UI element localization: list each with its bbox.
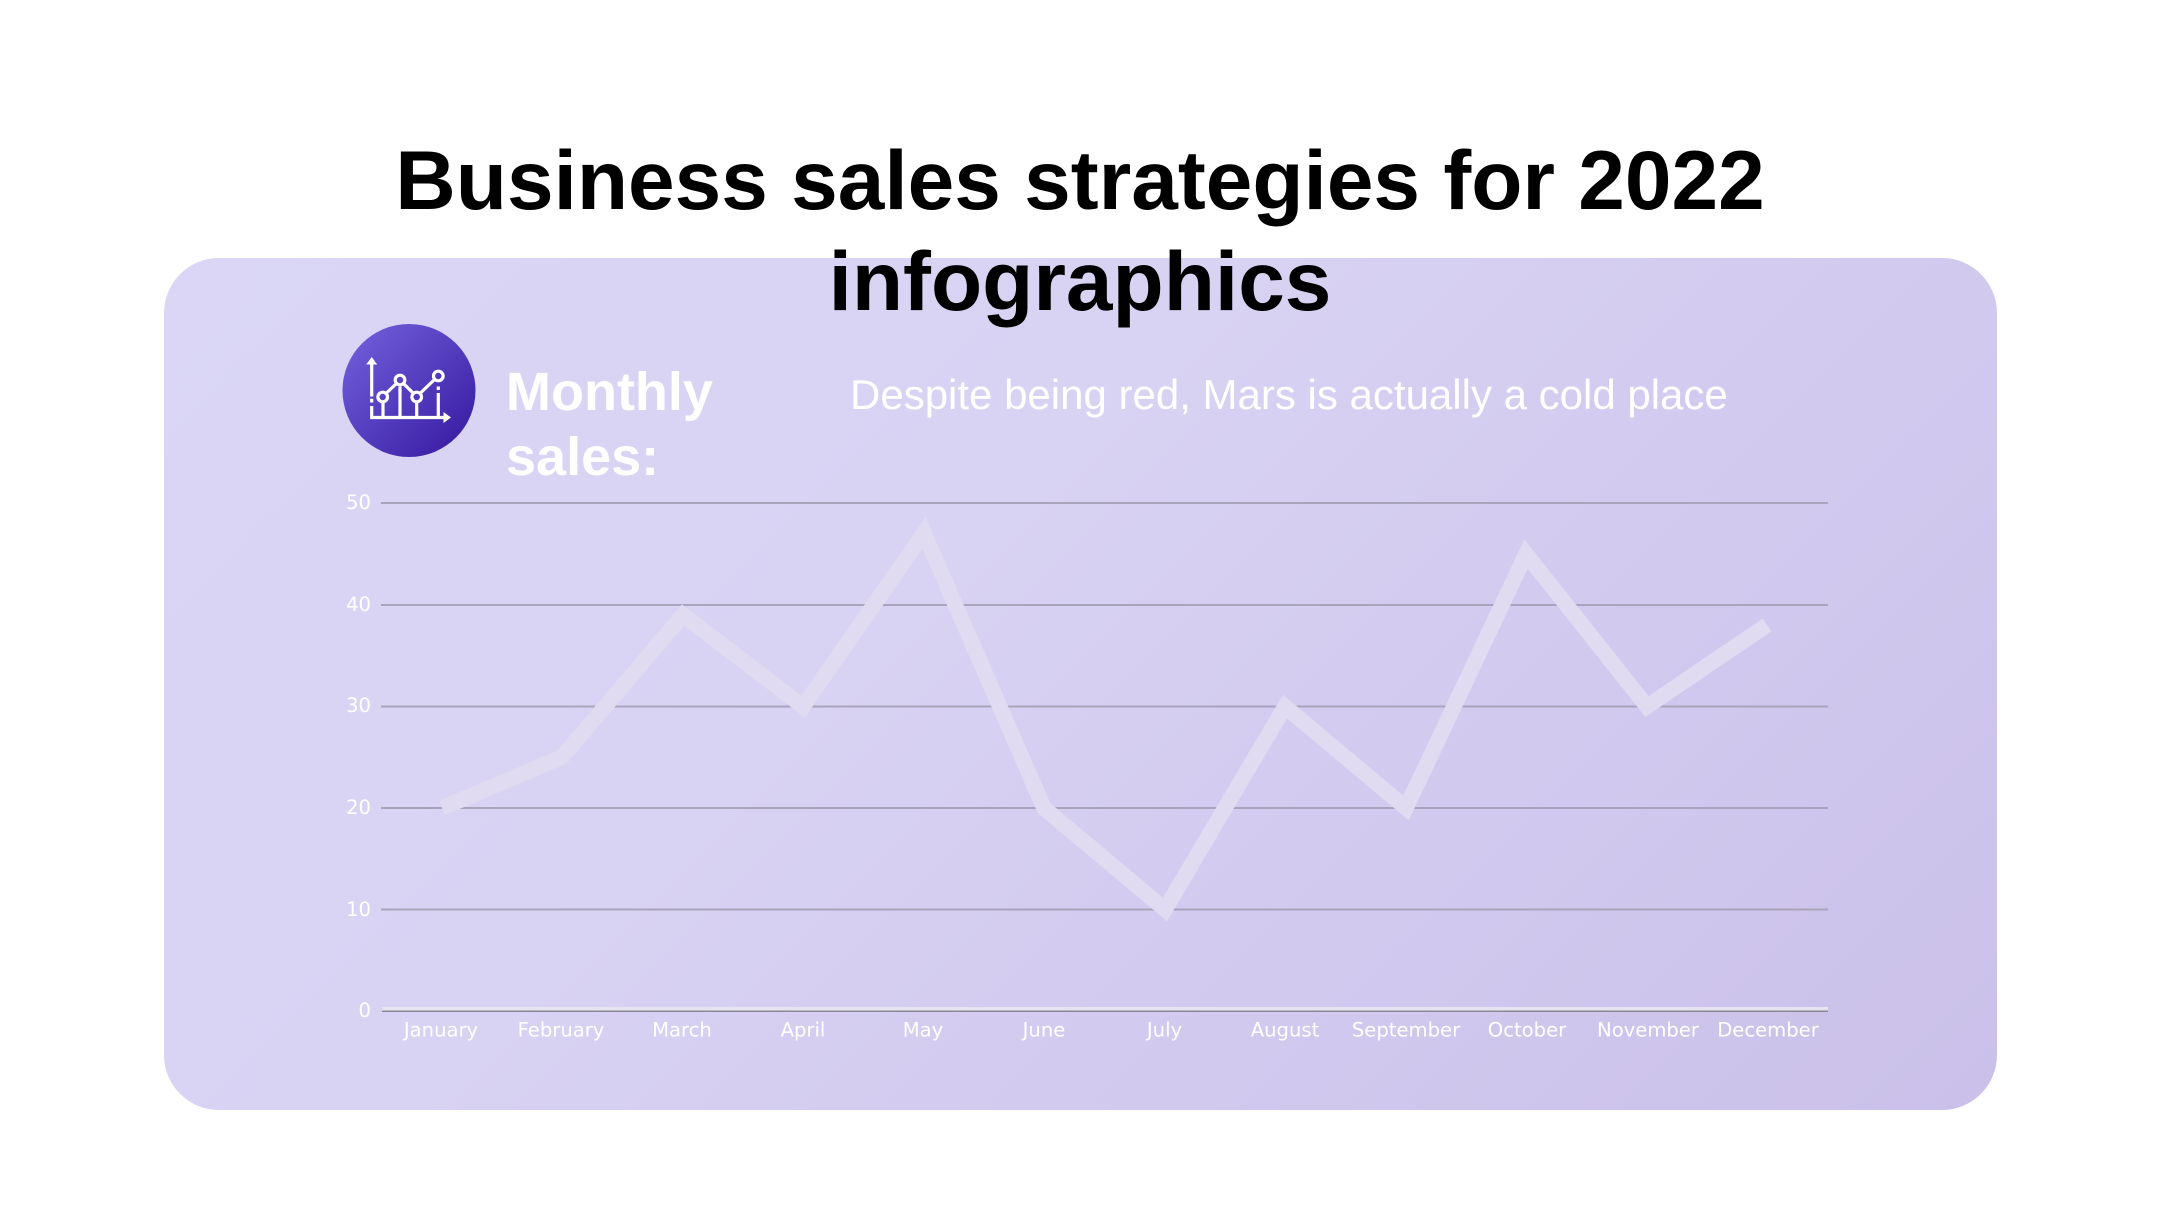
y axis labels: 40 <box>346 593 371 616</box>
x axis labels <box>402 1018 1820 1042</box>
x axis labels: December <box>1717 1018 1820 1042</box>
x axis labels: August <box>1251 1018 1320 1042</box>
x axis labels: March <box>652 1018 712 1042</box>
y axis labels: 30 <box>346 694 371 717</box>
y axis labels: 10 <box>346 898 371 921</box>
heading: monthly sales <box>506 362 713 487</box>
title: Business sales strategies for 2022 <box>395 133 1765 227</box>
title: infographics <box>829 234 1331 328</box>
text block: Mars note: Despite being red, Mars is actually a cold place <box>850 371 1728 418</box>
icon: line chart in circle <box>342 324 476 457</box>
x axis <box>382 1007 1828 1012</box>
x axis labels: June <box>1021 1018 1065 1042</box>
x axis labels: April <box>781 1018 825 1042</box>
y axis labels <box>346 491 371 1022</box>
panel: monthly sales background <box>164 258 1997 1110</box>
x axis labels: October <box>1488 1018 1567 1042</box>
heading: monthly sales: sales: <box>506 427 659 487</box>
gridlines <box>381 503 1828 910</box>
x axis labels: November <box>1597 1018 1700 1042</box>
x axis labels: February <box>518 1018 605 1042</box>
y axis labels: 0 <box>359 999 371 1022</box>
x axis labels: January <box>402 1018 479 1042</box>
title <box>395 133 1765 328</box>
x axis labels: May <box>903 1018 944 1042</box>
x axis labels: July <box>1145 1018 1183 1042</box>
y axis labels: 50 <box>346 491 371 514</box>
data line: monthly sales <box>442 533 1767 910</box>
y axis labels: 20 <box>346 796 371 819</box>
heading: monthly sales: Monthly <box>506 362 713 422</box>
x axis labels: September <box>1352 1018 1461 1042</box>
